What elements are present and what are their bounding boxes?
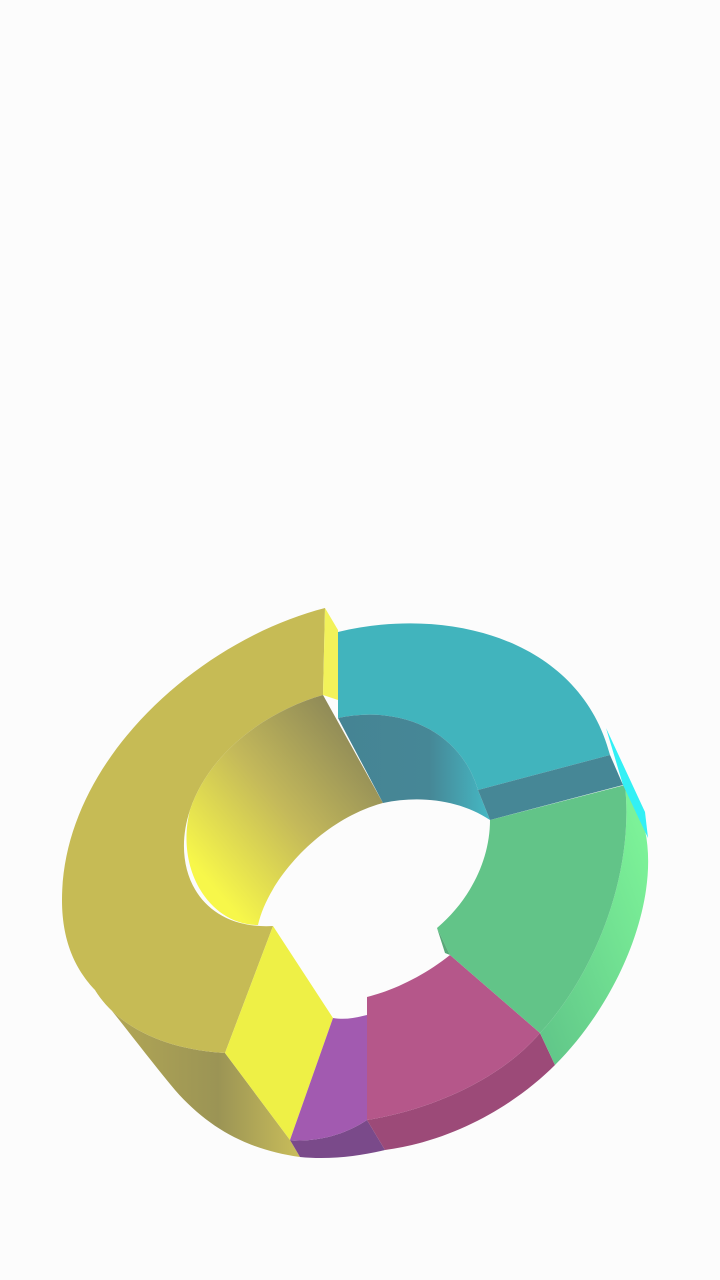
segment: teal [338, 623, 648, 838]
segment: olive (largest) [62, 608, 383, 1157]
segment: yellow [225, 926, 333, 1140]
segment: purple [290, 1015, 385, 1158]
segment: green [437, 785, 648, 1065]
segment: magenta [367, 955, 555, 1150]
